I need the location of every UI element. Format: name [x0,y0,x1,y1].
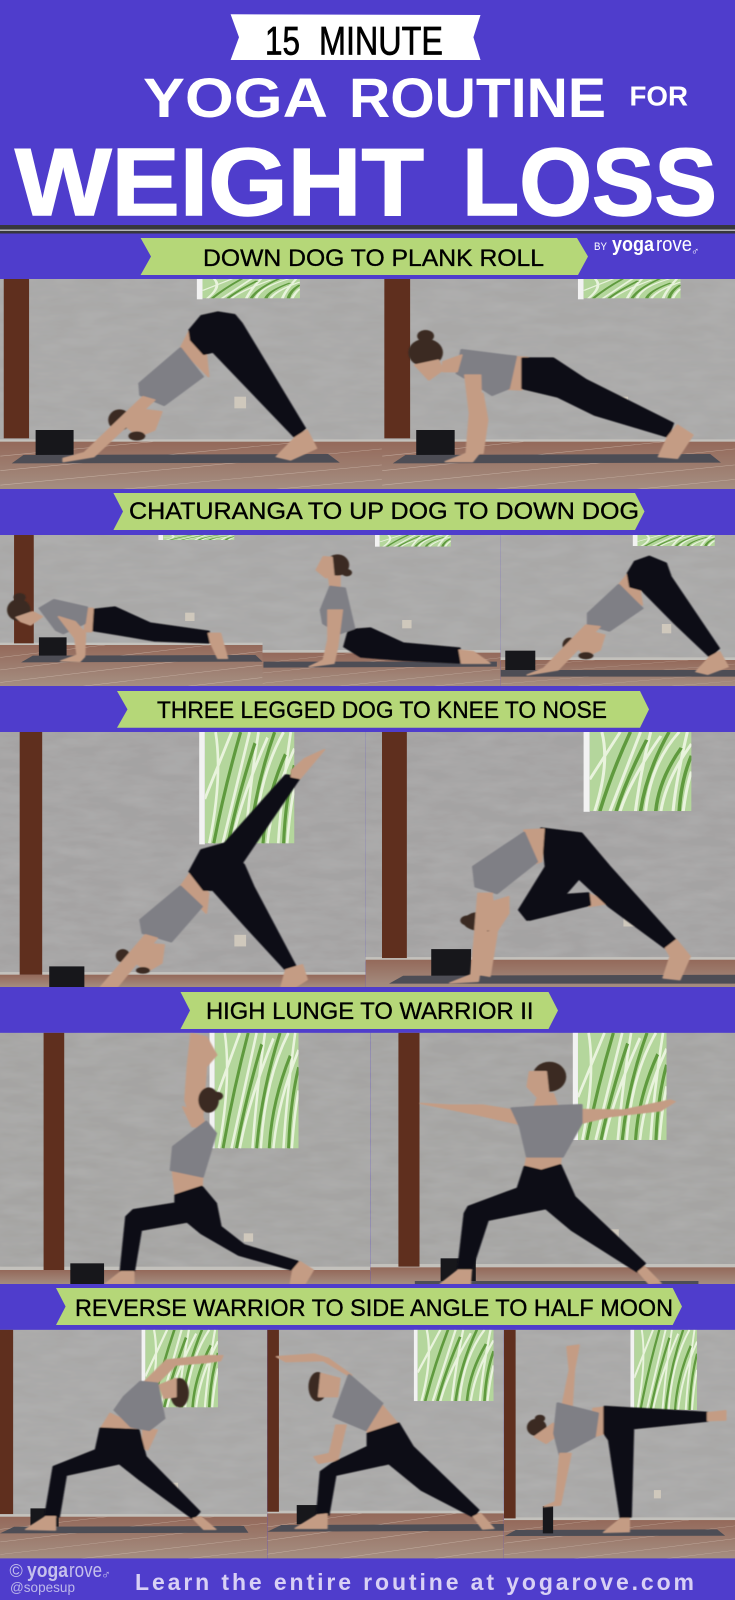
footer handle: @sopesup [10,1579,75,1595]
title: yoga routine for [143,66,688,129]
footer logo: yoga rove: yoga [27,1560,69,1582]
footer logo: yoga rove: ♂ [101,1567,111,1582]
photo: warrior ii [370,1032,735,1284]
title: yoga routine for: ROUTINE [349,66,606,129]
banner: reverse warrior to side angle to half moon [56,1288,682,1325]
banner: three legged dog to knee to nose [117,691,649,728]
banner: down dog to plank roll [141,238,588,275]
photo: down dog 2 [500,535,735,686]
photo: half moon [504,1330,735,1558]
banner: down dog to plank roll: DOWN DOG TO PLANK ROLL [203,245,544,272]
photo: knee to nose [366,732,735,987]
logo: by yoga rove: ♂ [691,246,699,258]
title: weight loss: WEIGHT [15,129,424,236]
photo: plank [382,279,735,489]
logo: by yoga rove: rove [656,234,692,256]
banner: three legged dog to knee to nose: THREE LEGGED DOG TO KNEE TO NOSE [157,697,607,724]
photo: high lunge [0,1032,370,1284]
logo: by yoga rove: yoga [612,234,655,256]
photo: down dog [0,279,382,489]
photo: side angle [267,1330,504,1558]
photo: up dog [262,535,500,686]
banner: chaturanga to up dog to down dog [113,493,644,530]
title: yoga routine for: YOGA [143,66,328,129]
title ribbon: 15 minute: MINUTE [319,20,443,64]
photo: reverse warrior [0,1330,268,1558]
footer call to action: Learn the entire routine at yogarove.com [135,1569,694,1595]
logo: by yoga rove: BY [594,241,608,253]
banner: reverse warrior to side angle to half moon: REVERSE WARRIOR TO SIDE ANGLE TO HALF MOON [75,1295,673,1322]
banner: chaturanga to up dog to down dog: CHATURANGA TO UP DOG TO DOWN DOG [129,498,639,525]
title ribbon: 15 minute: 15 [265,20,300,64]
banner: high lunge to warrior ii [180,992,558,1029]
title: weight loss [15,129,717,236]
title: weight loss: LOSS [462,129,717,236]
footer logo: yoga rove [10,1560,111,1582]
title ribbon: 15 minute [231,14,480,64]
title: yoga routine for: FOR [630,80,688,112]
logo: by yoga rove [594,234,699,258]
banner: high lunge to warrior ii: HIGH LUNGE TO WARRIOR II [206,998,534,1025]
photo: chaturanga [0,535,262,686]
photo: three legged dog [0,732,366,987]
footer logo: yoga rove: rove [69,1560,102,1582]
footer logo: yoga rove: © [10,1561,23,1581]
